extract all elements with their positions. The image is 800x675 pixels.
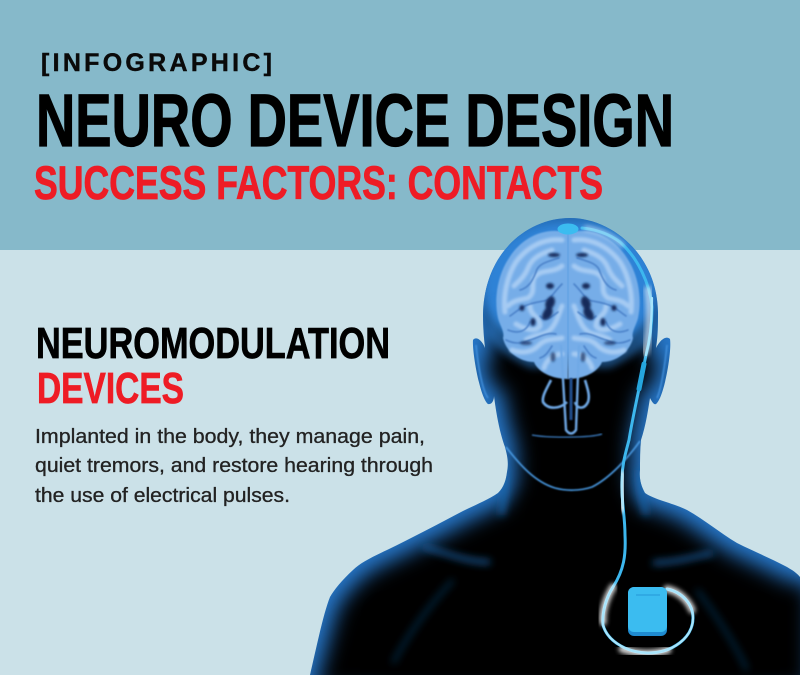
section heading: Neuromodulation Devices: NEUROMODULATION xyxy=(36,319,390,368)
eyebrow label: [INFOGRAPHIC]: [INFOGRAPHIC] xyxy=(41,49,272,77)
description text block xyxy=(35,426,433,507)
human figure with brain and implanted device xyxy=(300,210,800,675)
lead connector sleeve xyxy=(639,364,644,389)
header band background xyxy=(0,0,800,250)
white glow segments along the lead xyxy=(586,228,692,653)
brainstem and nose outline xyxy=(543,345,589,434)
body silhouette with glowing blue rim xyxy=(300,210,800,675)
section heading: Neuromodulation Devices: DEVICES xyxy=(37,364,184,413)
jaw line xyxy=(506,441,640,490)
section heading: Neuromodulation Devices xyxy=(36,319,390,413)
electrode disc on brain xyxy=(558,224,578,234)
implanted lead with glow xyxy=(582,228,693,653)
description text block: quiet tremors, and restore hearing through xyxy=(35,455,433,477)
collarbones and chest highlights xyxy=(393,470,747,670)
description text block: the use of electrical pulses. xyxy=(35,485,290,507)
lower panel background xyxy=(0,250,800,675)
ear details xyxy=(476,345,667,398)
mouth line xyxy=(532,434,602,437)
description text block: Implanted in the body, they manage pain, xyxy=(35,426,425,448)
brain xyxy=(496,231,640,379)
implanted pulse generator xyxy=(628,587,667,636)
subtitle: Success Factors: Contacts: SUCCESS FACTORS: CONTACTS xyxy=(34,156,603,209)
